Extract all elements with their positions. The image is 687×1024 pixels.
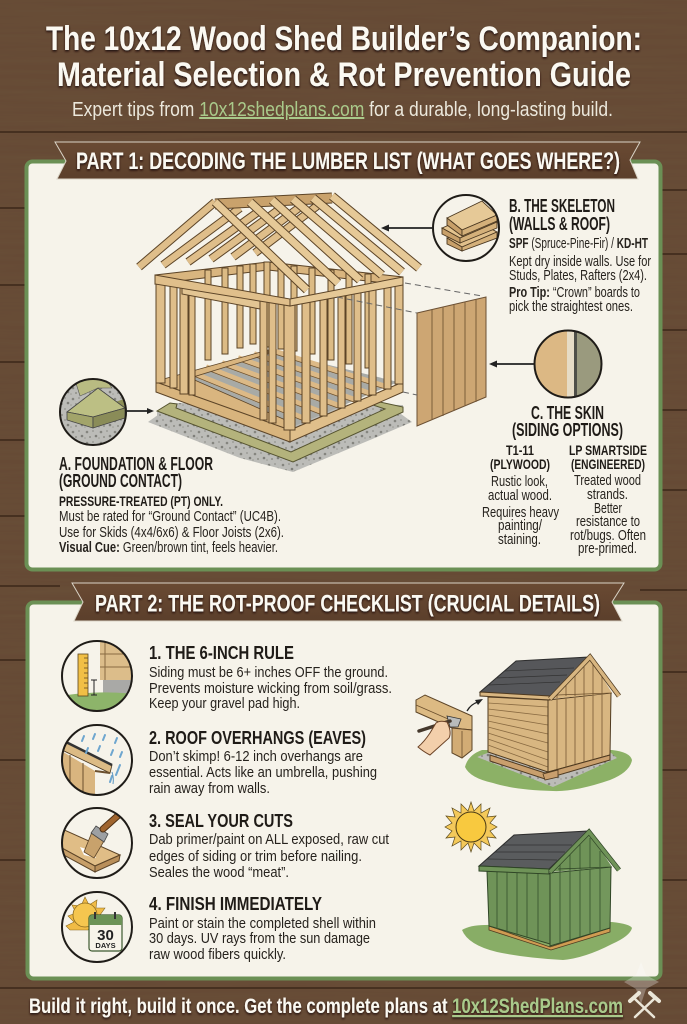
- banner: part 1 heading: [55, 142, 640, 179]
- text: LP SmartSide column: rot/bugs. Often: [570, 528, 646, 544]
- text: 6-inch rule: 1. THE 6-INCH RULE: [149, 643, 294, 663]
- illustration: painted green shed: [462, 831, 632, 960]
- icon: stacked lumber callout B: [433, 195, 499, 261]
- text: roof overhangs: 2. ROOF OVERHANGS (EAVES): [149, 728, 366, 748]
- text: LP SmartSide column: [569, 442, 647, 557]
- text: roof overhangs: Don’t skimp! 6-12 inch overhangs are: [149, 748, 363, 765]
- panel: part 1: [26, 162, 660, 570]
- text: roof overhangs: rain away from walls.: [149, 780, 270, 797]
- icon: pressure-treated skid callout A: [60, 378, 127, 445]
- text: LP SmartSide column: LP SMARTSIDE: [569, 442, 647, 458]
- text: LP SmartSide column: strands.: [587, 487, 628, 503]
- arrow: callout A to skids: [126, 408, 154, 414]
- banner: part 2 heading: [72, 583, 624, 621]
- text: 6-inch rule: Siding must be 6+ inches OFF the ground.: [149, 664, 388, 681]
- illustration: shed framing on skids: [139, 196, 419, 472]
- text: C the skin: C. THE SKIN: [531, 403, 604, 423]
- text: C the skin: [512, 403, 623, 440]
- text: LP SmartSide column: Better: [594, 501, 622, 517]
- arrow: callout C to siding panel: [489, 360, 534, 368]
- text: B the skeleton: SPF (Spruce-Pine-Fir) / KD-HT: [509, 236, 648, 252]
- text: A foundation and floor: A. FOUNDATION & FLOOR: [59, 454, 213, 474]
- icon: crossed hammers: [630, 993, 659, 1017]
- text: A foundation and floor: Visual Cue: Green/brown tint, feels heavier.: [59, 540, 278, 556]
- text: LP SmartSide column: (ENGINEERED): [571, 456, 645, 472]
- text: 6-inch rule: Keep your gravel pad high.: [149, 695, 300, 712]
- illustration: hand sealing a post: [416, 695, 472, 758]
- text: B the skeleton: Pro Tip: “Crown” boards to: [509, 285, 640, 301]
- text: T1-11 plywood column: staining.: [498, 532, 541, 548]
- text: seal your cuts: Dab primer/paint on ALL exposed, raw cut: [149, 831, 390, 848]
- text: T1-11 plywood column: Requires heavy: [482, 505, 560, 521]
- icon: sun and 30-day calendar: [62, 892, 132, 962]
- icon: roof overhang and rain: [60, 725, 132, 800]
- text: C the skin: (SIDING OPTIONS): [512, 420, 623, 440]
- illustration: siding panel: [417, 297, 486, 426]
- subtitle: Expert tips from 10x12shedplans.com for a durable, long-lasting build.: [72, 99, 613, 121]
- text: A foundation and floor: PRESSURE-TREATED (PT) ONLY.: [59, 493, 223, 509]
- text: LP SmartSide column: Treated wood: [574, 473, 641, 489]
- text: T1-11 plywood column: [482, 442, 560, 548]
- icon: sun and 30-day calendar: 30: [97, 927, 114, 944]
- text: roof overhangs: essential. Acts like an umbrella, pushing: [149, 764, 377, 781]
- text: A foundation and floor: [59, 454, 284, 556]
- text: A foundation and floor: Must be rated for “Ground Contact” (UC4B).: [59, 509, 281, 525]
- text: LP SmartSide column: resistance to: [576, 514, 640, 530]
- panel: part 2: [28, 602, 660, 978]
- illustration: sun: [445, 802, 497, 852]
- text: T1-11 plywood column: (PLYWOOD): [490, 456, 550, 472]
- text: B the skeleton: B. THE SKELETON: [509, 196, 615, 216]
- text: seal your cuts: Seales the wood “meat”.: [149, 864, 289, 881]
- arrow: callout B to rafters: [381, 224, 433, 232]
- roof rafters: [139, 196, 419, 290]
- dashed guide lines: [337, 283, 482, 395]
- text: 6-inch rule: [149, 643, 392, 712]
- text: seal your cuts: 3. SEAL YOUR CUTS: [149, 811, 293, 831]
- illustration: unpainted shed on gravel: [465, 657, 632, 791]
- text: finish immediately: 4. FINISH IMMEDIATELY: [149, 894, 322, 914]
- icon: 6-inch rule: [60, 641, 134, 713]
- text: T1-11 plywood column: actual wood.: [488, 488, 552, 504]
- footer text: Build it right, build it once. Get the complete plans at 10x12ShedPlans.com: [29, 995, 623, 1018]
- text: LP SmartSide column: pre-primed.: [578, 541, 637, 557]
- text: finish immediately: raw wood fibers quickly.: [149, 946, 286, 963]
- text: seal your cuts: [149, 811, 390, 881]
- text: 6-inch rule: Prevents moisture wicking from soil/grass.: [149, 680, 392, 697]
- text: roof overhangs: [149, 728, 377, 797]
- text: finish immediately: 30 days. UV rays from the sun damage: [149, 930, 370, 947]
- text: B the skeleton: pick the straightest ones.: [509, 299, 633, 315]
- text: finish immediately: [149, 894, 376, 963]
- text: finish immediately: Paint or stain the completed shell within: [149, 915, 376, 932]
- icon: siding cross-section callout C: [534, 330, 603, 398]
- text: B the skeleton: Studs, Plates, Rafters (2x4).: [509, 268, 647, 284]
- arrow: brush to shed: [467, 699, 483, 711]
- text: seal your cuts: edges of siding or trim before nailing.: [149, 848, 362, 865]
- text: T1-11 plywood column: painting/: [498, 518, 543, 534]
- text: T1-11 plywood column: Rustic look,: [491, 474, 548, 490]
- watermark sparkle: [624, 962, 659, 1004]
- text: B the skeleton: [509, 196, 651, 315]
- text: B the skeleton: (WALLS & ROOF): [509, 214, 610, 234]
- text: T1-11 plywood column: T1-11: [506, 442, 534, 458]
- icon: sun and 30-day calendar: DAYS: [95, 941, 116, 950]
- text: A foundation and floor: Use for Skids (4x4/6x6) & Floor Joists (2x6).: [59, 525, 284, 541]
- title: [46, 20, 642, 94]
- icon: paint brush sealing a cut: [60, 808, 132, 878]
- text: A foundation and floor: (GROUND CONTACT): [59, 471, 182, 491]
